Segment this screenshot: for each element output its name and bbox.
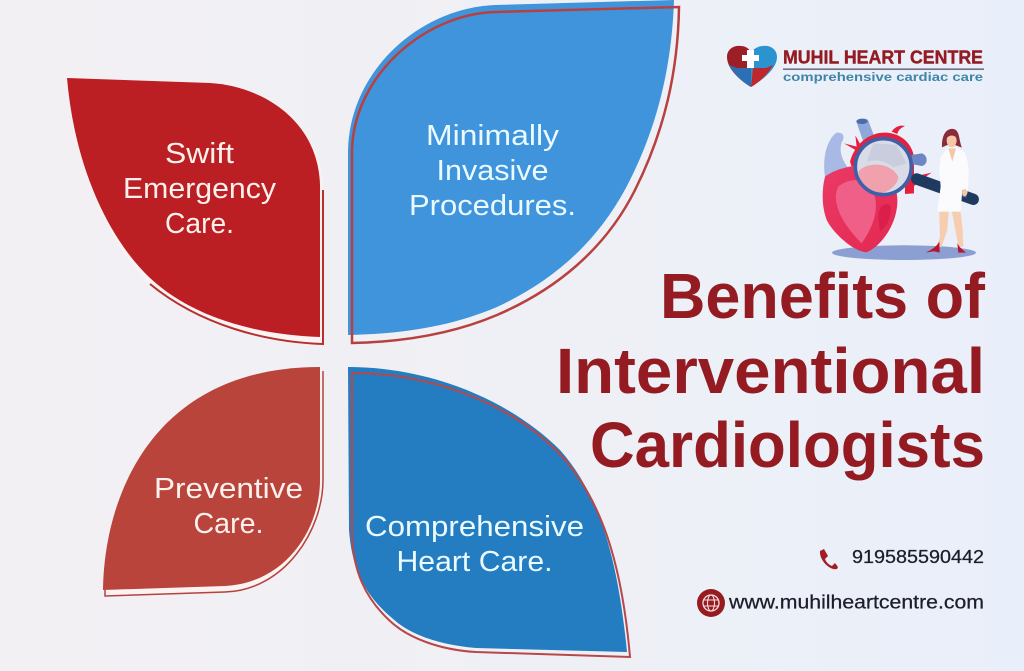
panel: preventive care: Care.: [194, 508, 264, 540]
title: Cardiologists: [590, 409, 985, 481]
icon: heart: [823, 119, 932, 252]
panel: comprehensive heart care: Heart Care.: [396, 546, 552, 578]
title: Benefits of: [660, 260, 986, 332]
panel: minimally invasive procedures: [348, 0, 679, 343]
title: Interventional: [556, 335, 985, 407]
logo: MUHIL HEART CENTRE: [783, 48, 983, 68]
panel: comprehensive heart care: Comprehensive: [365, 511, 584, 543]
icon: magnifier: [855, 139, 973, 199]
contact: website: [697, 589, 984, 617]
panel: comprehensive heart care: [348, 367, 630, 657]
panel: preventive care: [103, 367, 323, 596]
panel: swift emergency care: Care.: [165, 208, 234, 240]
ground shadow: [832, 245, 976, 260]
title: [556, 260, 986, 481]
icon: doctor: [925, 129, 969, 253]
contact: phone: [820, 546, 984, 569]
illustration: doctor inspecting heart with magnifier: [823, 119, 976, 260]
logo: [727, 46, 984, 87]
contact: website: www.muhilheartcentre.com: [728, 592, 984, 614]
panel: swift emergency care: Swift: [165, 138, 234, 170]
panel: minimally invasive procedures: Minimally: [426, 120, 560, 152]
icon: globe: [697, 589, 725, 617]
icon: phone: [820, 549, 838, 569]
logo: comprehensive cardiac care: [783, 72, 983, 84]
panel: minimally invasive procedures: Procedures.: [409, 190, 576, 222]
panel: preventive care: Preventive: [154, 473, 303, 505]
panel: swift emergency care: [67, 78, 323, 344]
contact: phone: 919585590442: [852, 546, 984, 567]
icon: heart logo: [727, 46, 777, 87]
panel: swift emergency care: Emergency: [123, 173, 277, 205]
panel: minimally invasive procedures: Invasive: [436, 155, 548, 187]
